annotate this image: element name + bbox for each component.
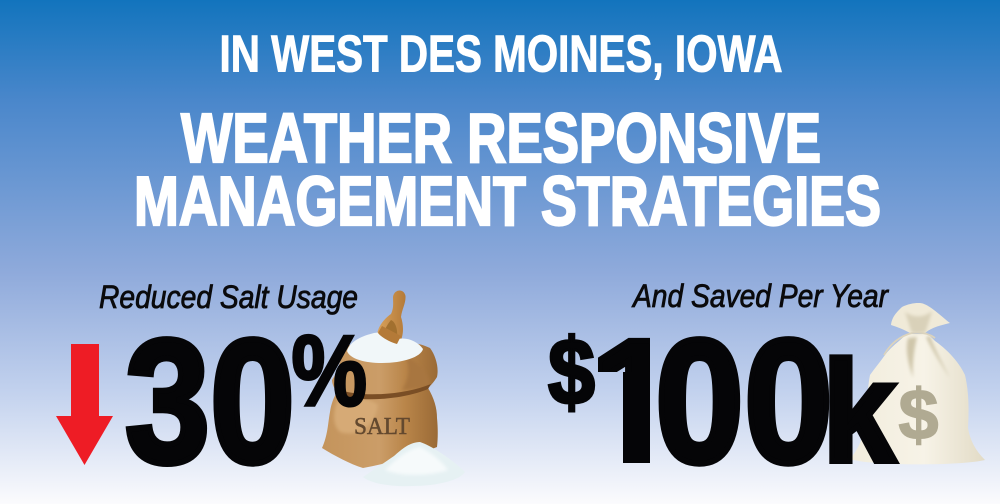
icon: red down arrow [56,344,113,465]
panel: reduced salt usage [56,279,465,500]
percent sign: % [292,315,367,427]
icon: money bag [850,303,985,464]
sack highlight [334,398,378,433]
salt pile [363,442,465,486]
label: reduced salt usage: Reduced Salt Usage [99,279,358,315]
subtitle: location: IN WEST DES MOINES, IOWA [220,26,782,84]
letter k: k [823,333,895,492]
value: 100 [598,336,830,467]
value: 100: 00 [655,304,833,500]
sack body [322,340,438,468]
sack roll shading [402,355,430,390]
title [134,99,881,240]
salt pile highlight [385,447,448,475]
value: 100: 1 [587,304,685,500]
dollar sign: $ [548,319,595,424]
salt in sack [347,332,423,363]
title: WEATHER RESPONSIVE [181,99,821,177]
scoop lower lip over salt [378,326,401,344]
value: 30: 30 [125,304,295,500]
icon: salt sack [322,290,465,486]
scoop [377,290,406,345]
bag creases [907,336,950,378]
sack label: SALT [354,414,410,440]
bag tie [884,333,935,355]
bag body [850,334,985,464]
bag knot [891,303,950,333]
dollar sign on bag: $ [898,376,938,455]
panel: saved per year [548,283,985,467]
bag knot shading [905,311,932,333]
sack fold [337,384,431,399]
label: and saved per year: And Saved Per Year [631,278,889,314]
